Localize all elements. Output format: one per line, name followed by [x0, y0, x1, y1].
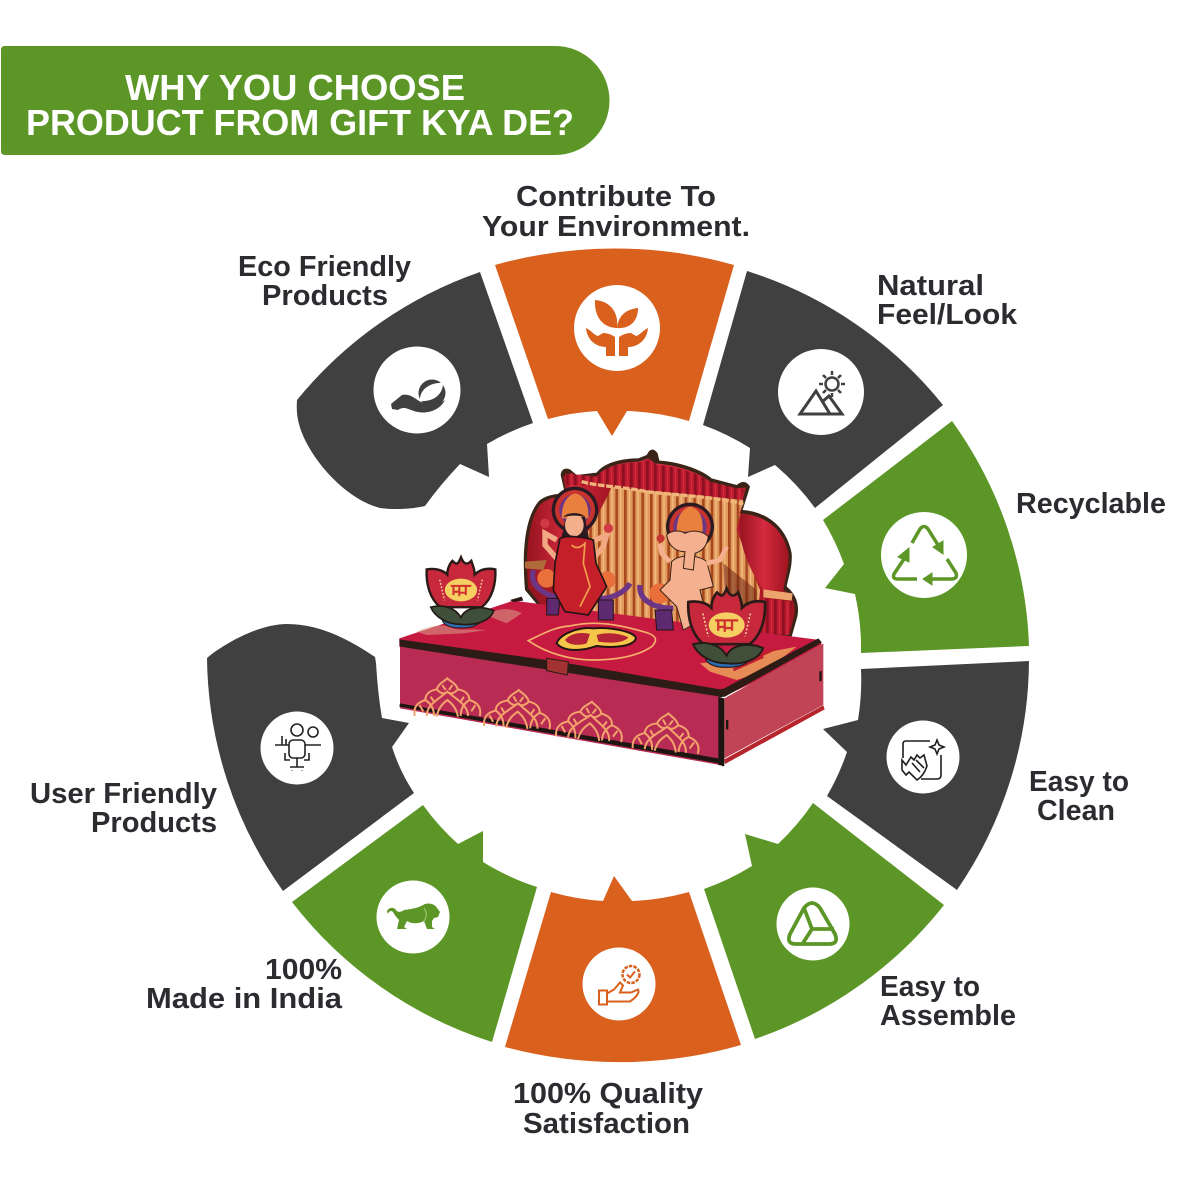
title banner	[1, 46, 610, 155]
label: 100% made in india	[146, 954, 343, 1015]
label: user friendly products: Products	[91, 807, 217, 839]
label: 100% quality satisfaction	[513, 1078, 703, 1140]
panel: made in india	[292, 805, 537, 1042]
label: easy to clean	[1029, 766, 1129, 827]
label: eco friendly products	[238, 251, 411, 312]
panel: user friendly products	[207, 624, 414, 891]
label: contribute to your environment	[482, 181, 750, 243]
label: easy to clean: Clean	[1037, 795, 1115, 827]
label: natural feel/look	[877, 270, 1018, 331]
label: easy to assemble: Easy to	[880, 971, 980, 1003]
feet mandala	[528, 623, 655, 660]
panel: easy to clean	[823, 661, 1029, 890]
label: user friendly products: User Friendly	[30, 778, 217, 810]
icon: sun and mountains	[800, 371, 845, 414]
icon: leaves in hands	[586, 300, 648, 356]
icon: hand wiping sparkle	[902, 740, 944, 780]
back panel with curtains	[524, 450, 798, 637]
label: natural feel/look: Feel/Look	[877, 299, 1018, 331]
label: eco friendly products: Eco Friendly	[238, 251, 411, 283]
panel: recyclable	[823, 421, 1029, 653]
label: contribute to your environment: Contribute To	[516, 181, 716, 213]
label: easy to assemble	[880, 971, 1016, 1032]
box: top, front and side faces	[399, 597, 825, 767]
title banner: PRODUCT FROM GIFT KYA DE?	[26, 102, 574, 143]
label: user friendly products	[30, 778, 217, 839]
icon: rounded triangle	[789, 903, 836, 944]
icon: lion	[387, 904, 440, 929]
label: 100% made in india: Made in India	[146, 983, 343, 1015]
title banner: WHY YOU CHOOSE	[125, 67, 465, 108]
label: natural feel/look: Natural	[877, 270, 984, 302]
label: recyclable: Recyclable	[1016, 488, 1166, 520]
product: wooden mandir box	[399, 450, 825, 767]
lotus: shubh	[427, 557, 495, 628]
label: eco friendly products: Products	[262, 280, 388, 312]
lotus: labh	[688, 589, 765, 667]
label: easy to clean: Easy to	[1029, 766, 1129, 798]
panel: contribute to your environment	[495, 248, 734, 436]
label: easy to assemble: Assemble	[880, 1000, 1016, 1032]
panel: natural feel/look	[703, 271, 943, 508]
label: 100% quality satisfaction: Satisfaction	[523, 1108, 690, 1140]
panel: easy to assemble	[704, 803, 944, 1039]
icon: hand holding leaf	[391, 380, 446, 412]
panel: eco friendly products	[297, 272, 533, 509]
figure: ganesha	[640, 503, 727, 630]
label: contribute to your environment: Your Environment.	[482, 211, 750, 243]
icon: person at desk	[275, 724, 321, 770]
icon: hand with quality badge	[599, 966, 640, 1004]
panel: 100% quality satisfaction	[505, 876, 741, 1062]
label: 100% made in india: 100%	[265, 954, 342, 986]
figure: lakshmi	[532, 487, 630, 620]
icon: recycle arrows	[894, 526, 956, 585]
label: 100% quality satisfaction: 100% Quality	[513, 1078, 703, 1110]
